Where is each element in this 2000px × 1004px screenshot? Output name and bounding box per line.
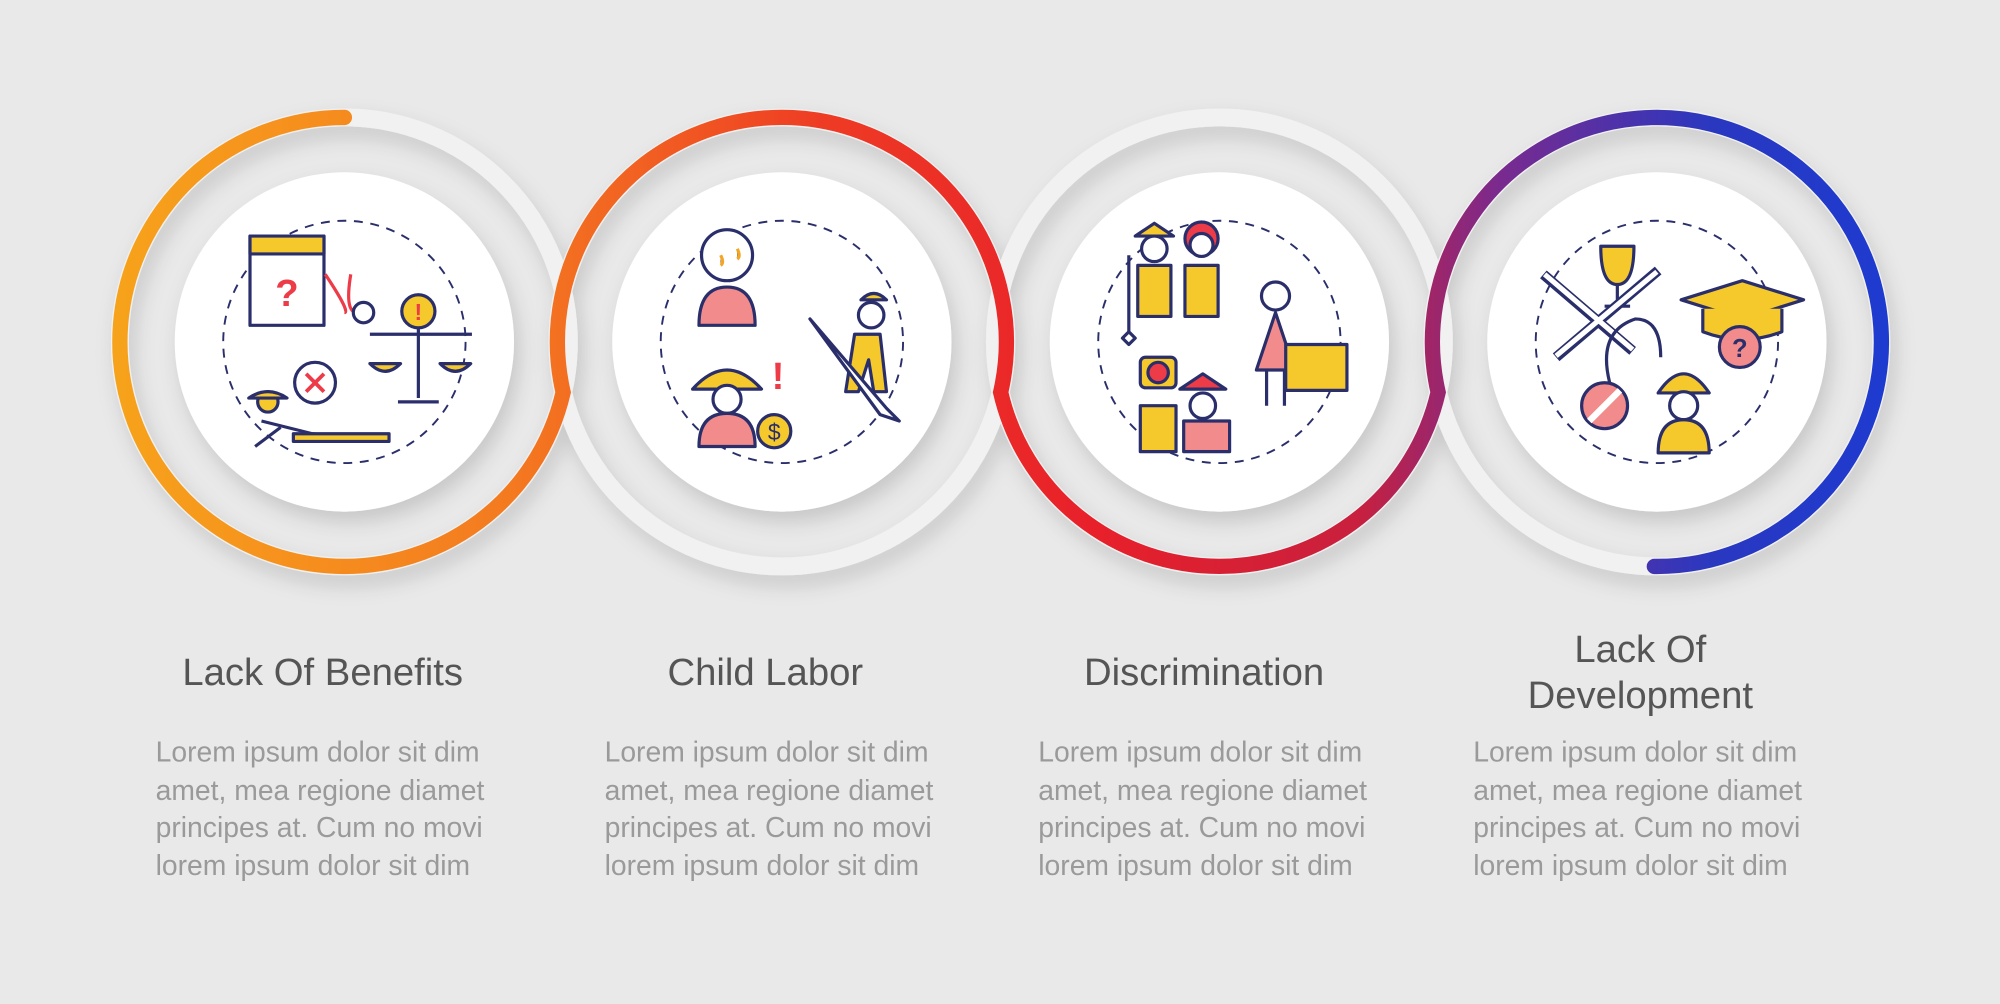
inner white circles xyxy=(175,172,1827,512)
body texts: amet, mea regione diamet xyxy=(605,774,933,806)
icon: discrimination xyxy=(1122,222,1347,452)
body texts: lorem ipsum dolor sit dim xyxy=(1038,849,1353,881)
icon: child labor xyxy=(693,230,899,448)
body texts xyxy=(156,736,1802,881)
body texts: lorem ipsum dolor sit dim xyxy=(605,849,919,881)
body texts: principes at. Cum no movi xyxy=(156,811,483,843)
body texts: amet, mea regione diamet xyxy=(1473,774,1802,806)
icon: lack of development xyxy=(1543,246,1804,453)
headings: Lack Of Benefits xyxy=(182,651,463,694)
body texts: lorem ipsum dolor sit dim xyxy=(1473,849,1788,881)
ring tracks xyxy=(120,117,1881,566)
body texts: Lorem ipsum dolor sit dim xyxy=(605,736,929,768)
icon: lack of benefits xyxy=(249,236,472,447)
icon: child labor: ! xyxy=(772,355,784,398)
body texts: principes at. Cum no movi xyxy=(1473,811,1800,843)
icon: lack of benefits: ? xyxy=(275,272,299,315)
headings: Lack Of xyxy=(1574,628,1707,671)
body texts: Lorem ipsum dolor sit dim xyxy=(1038,736,1362,768)
headings: Child Labor xyxy=(667,651,863,694)
headings: Discrimination xyxy=(1084,651,1324,694)
body texts: amet, mea regione diamet xyxy=(156,774,484,806)
body texts: Lorem ipsum dolor sit dim xyxy=(156,736,480,768)
body texts: amet, mea regione diamet xyxy=(1038,774,1367,806)
headings: Development xyxy=(1528,674,1753,717)
snake gradient path xyxy=(120,117,1881,566)
icon: lack of development: ? xyxy=(1732,335,1748,363)
body texts: lorem ipsum dolor sit dim xyxy=(156,849,470,881)
body texts: Lorem ipsum dolor sit dim xyxy=(1473,736,1797,768)
body texts: principes at. Cum no movi xyxy=(1038,811,1365,843)
headings xyxy=(182,628,1753,717)
icon: lack of benefits: ! xyxy=(415,299,422,325)
icon: child labor: $ xyxy=(768,419,781,445)
body texts: principes at. Cum no movi xyxy=(605,811,932,843)
